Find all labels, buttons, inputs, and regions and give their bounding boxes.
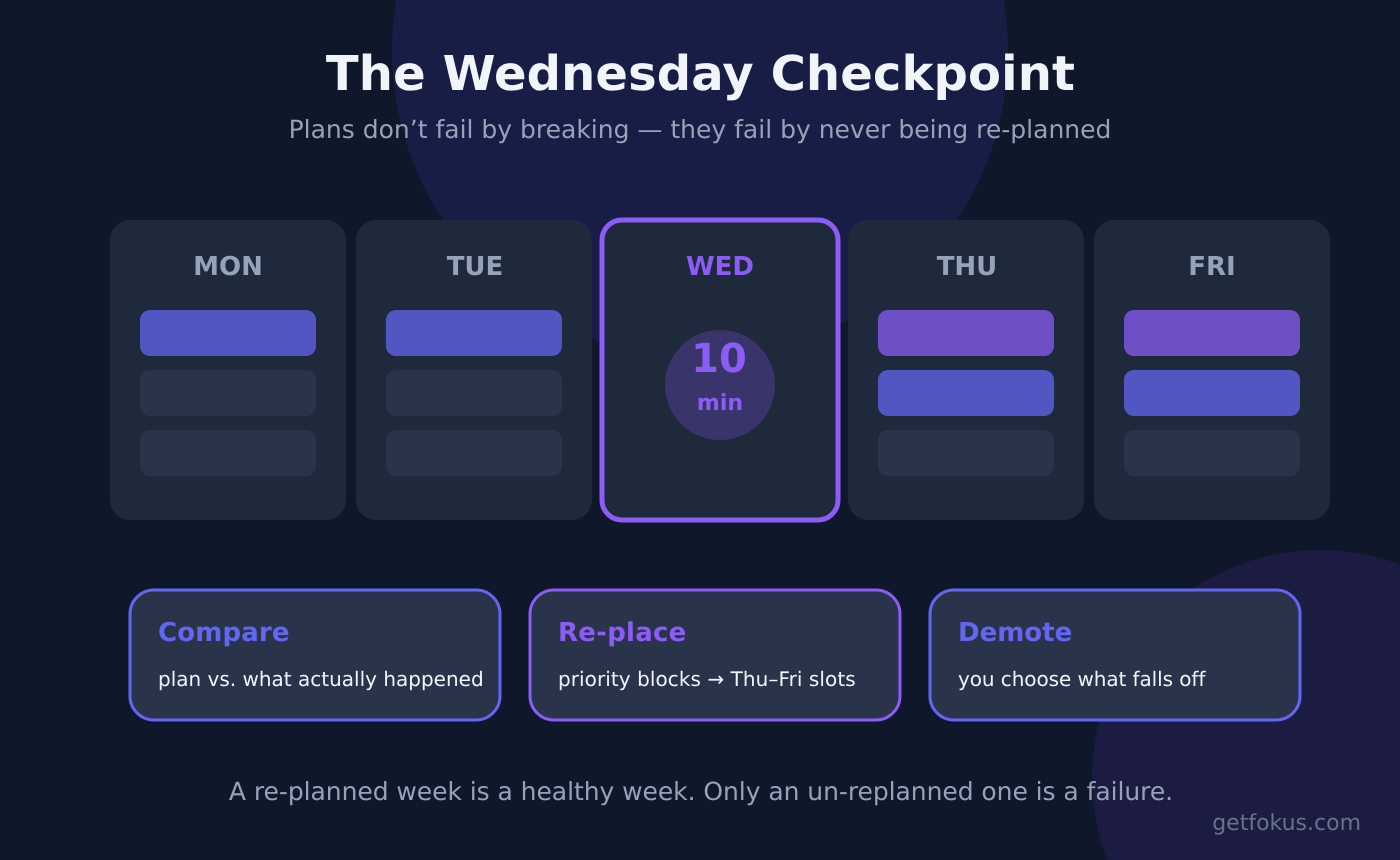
badge: 10 min: min (697, 391, 743, 416)
panel: Thursday (848, 220, 1084, 520)
heading: MON: MON (193, 252, 263, 282)
card: Demote: you choose what falls off (958, 667, 1206, 691)
block: Thursday moved (878, 310, 1054, 356)
block: Tuesday empty 2 (386, 430, 562, 476)
card: Demote (930, 590, 1300, 720)
block: Tuesday empty 1 (386, 370, 562, 416)
block: Friday empty (1124, 430, 1300, 476)
subtitle: Plans don’t fail by breaking — they fail by never being re-planned (289, 115, 1111, 144)
block: Thursday empty (878, 430, 1054, 476)
title: The Wednesday Checkpoint (326, 46, 1075, 102)
panel: Tuesday (356, 220, 592, 520)
heading: FRI: FRI (1188, 252, 1236, 282)
block: Tuesday priority (386, 310, 562, 356)
card: Re-place (530, 590, 900, 720)
card: Re-place: priority blocks → Thu–Fri slots (558, 667, 856, 691)
heading: THU: THU (937, 252, 997, 282)
closing statement: A re-planned week is a healthy week. Only an un-replanned one is a failure. (229, 777, 1173, 806)
block: Monday priority (140, 310, 316, 356)
badge: 10 min (665, 330, 775, 440)
block: Friday moved (1124, 310, 1300, 356)
card: Compare: plan vs. what actually happened (158, 667, 484, 691)
panel: Wednesday checkpoint (602, 220, 838, 520)
block: Monday empty 2 (140, 430, 316, 476)
card: Re-place: Re-place (558, 618, 687, 648)
block: Monday empty 1 (140, 370, 316, 416)
panel: Monday (110, 220, 346, 520)
card: Demote: Demote (958, 618, 1072, 648)
badge: 10 min: 10 (691, 336, 747, 382)
heading: TUE: TUE (447, 252, 503, 282)
heading: WED: WED (686, 252, 754, 282)
brand: getfokus.com: getfokus.com (1212, 811, 1361, 836)
card: Compare (130, 590, 500, 720)
card: Compare: Compare (158, 618, 290, 648)
block: Thursday priority (878, 370, 1054, 416)
block: Friday priority (1124, 370, 1300, 416)
panel: Friday (1094, 220, 1330, 520)
